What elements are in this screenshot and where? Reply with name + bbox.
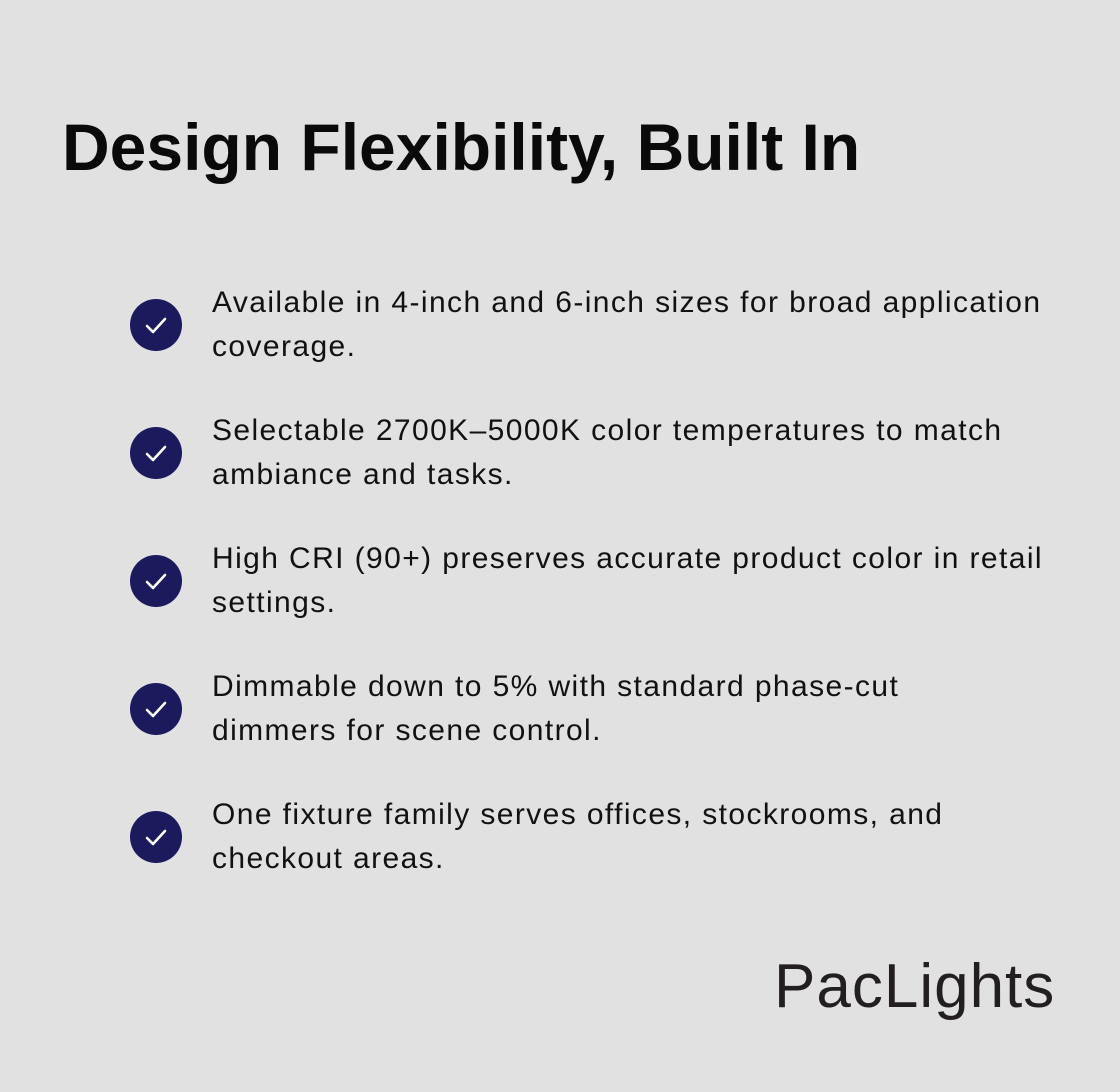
item 4 bbox=[130, 670, 899, 747]
text: Selectable 2700K–5000K color temperatures to match bbox=[212, 414, 1002, 447]
icon: check bbox=[130, 427, 182, 479]
text bbox=[212, 670, 899, 747]
text: dimmers for scene control. bbox=[212, 714, 602, 747]
text: checkout areas. bbox=[212, 842, 445, 875]
icon: check bbox=[130, 299, 182, 351]
text: settings. bbox=[212, 586, 336, 619]
text: coverage. bbox=[212, 330, 356, 363]
text bbox=[212, 798, 943, 875]
text: One fixture family serves offices, stockrooms, and bbox=[212, 798, 943, 831]
item 3 bbox=[130, 542, 1043, 619]
text: ambiance and tasks. bbox=[212, 458, 514, 491]
text: Dimmable down to 5% with standard phase-cut bbox=[212, 670, 899, 703]
item 5 bbox=[130, 798, 943, 875]
title: Design Flexibility, Built In bbox=[62, 110, 860, 184]
icon: check bbox=[130, 683, 182, 735]
text bbox=[212, 542, 1043, 619]
icon: check bbox=[130, 555, 182, 607]
text bbox=[212, 286, 1041, 363]
logo: PacLights bbox=[774, 952, 1055, 1021]
text: High CRI (90+) preserves accurate product color in retail bbox=[212, 542, 1043, 575]
text: Available in 4-inch and 6-inch sizes for broad application bbox=[212, 286, 1041, 319]
icon: check bbox=[130, 811, 182, 863]
text bbox=[212, 414, 1002, 491]
item 1 bbox=[130, 286, 1041, 363]
item 2 bbox=[130, 414, 1002, 491]
